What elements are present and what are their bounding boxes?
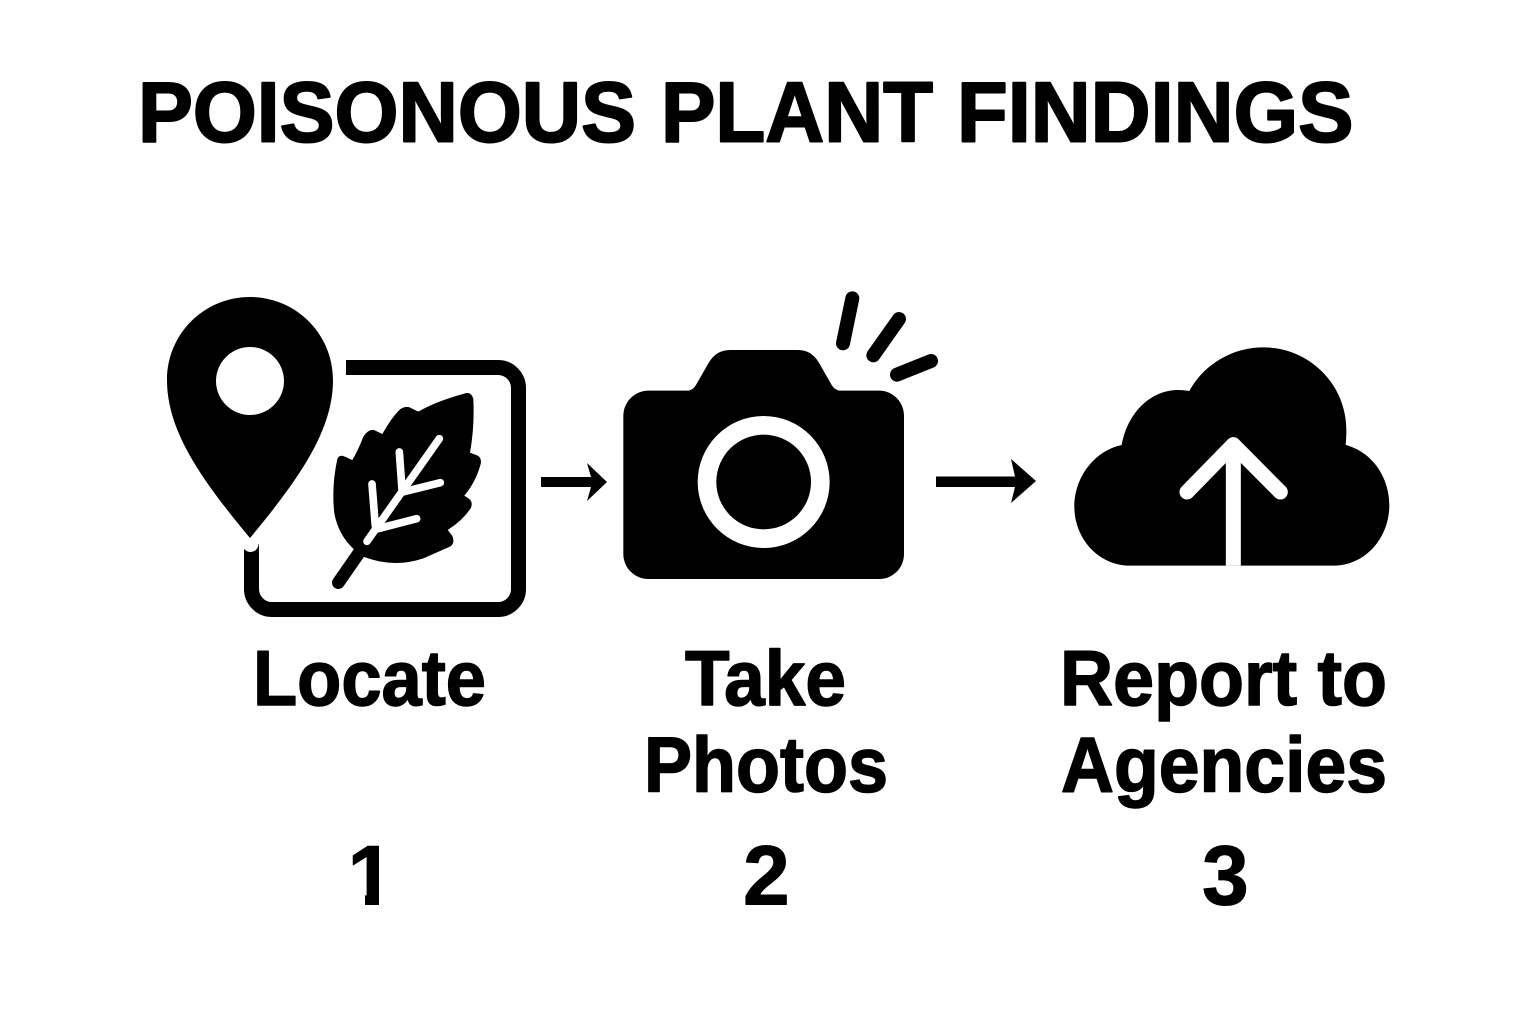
label: Report to Agencies: Report to — [1060, 634, 1387, 722]
label: Report to Agencies — [1060, 634, 1387, 808]
icon: cloud upload — [1074, 347, 1389, 566]
step number 1: 1 — [348, 828, 394, 922]
camera body — [623, 350, 904, 579]
title: FINDINGS — [957, 66, 1354, 161]
leaf — [333, 393, 481, 583]
upload arrow — [1187, 445, 1280, 566]
icon: camera with flash — [623, 298, 931, 579]
label: Locate: Locate — [253, 634, 486, 722]
label: Take Photos: Take — [685, 634, 846, 722]
arrow: step 1 to step 2 — [541, 463, 607, 501]
step number 2: 2 — [743, 828, 790, 922]
cloud — [1074, 347, 1389, 566]
flash lines — [843, 298, 931, 375]
label: Report to Agencies: Agencies — [1061, 720, 1387, 808]
label: Take Photos — [644, 634, 888, 808]
icon: location pin with leaf in frame — [167, 297, 518, 610]
step number 3: 3 — [1202, 828, 1249, 922]
leaf stem — [338, 553, 359, 583]
label: Take Photos: Photos — [644, 720, 888, 808]
frame — [252, 368, 518, 610]
title: PLANT — [661, 66, 933, 161]
location pin — [167, 297, 333, 538]
leaf veins — [367, 439, 440, 541]
arrow: step 2 to step 3 — [936, 459, 1036, 503]
title: POISONOUS — [138, 66, 636, 161]
